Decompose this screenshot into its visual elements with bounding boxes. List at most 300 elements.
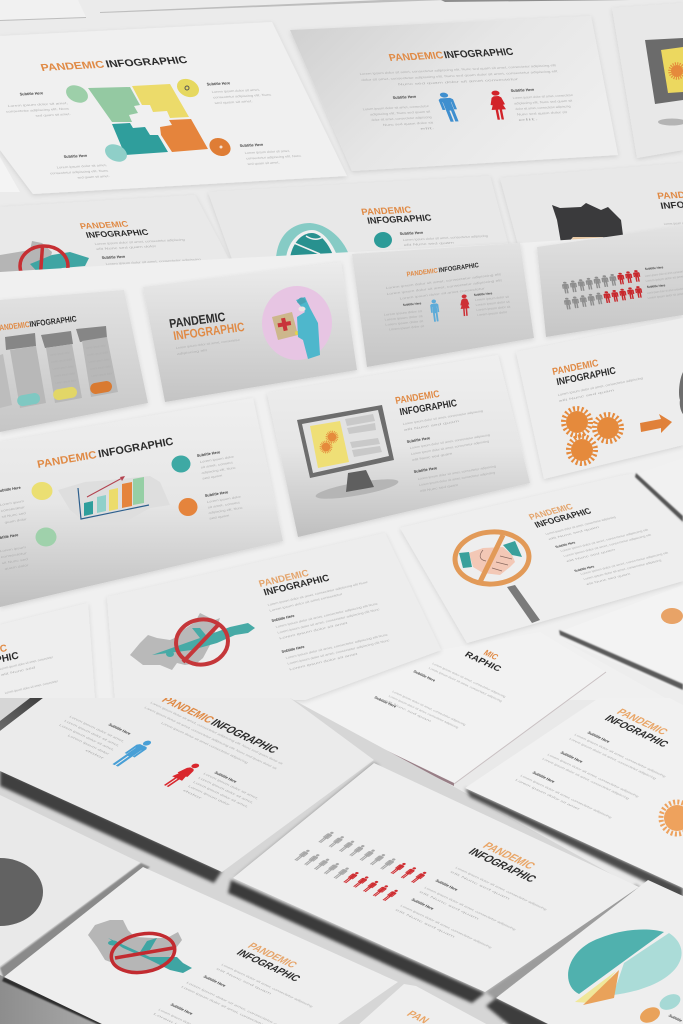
title	[394, 387, 458, 419]
subtitle right: Subtitle Here	[510, 88, 535, 93]
lower left background	[0, 698, 640, 1024]
text block: Lorem ipsum dolor sit amet, consectetur	[4, 679, 59, 695]
subtitle: Subtitle Here	[554, 541, 576, 549]
text block left: dolor	[84, 749, 105, 760]
title	[387, 46, 515, 64]
title: INFOGRAPHIC	[399, 398, 458, 418]
table text: Lorem ipsum dolor	[55, 378, 77, 385]
slide: people perspective	[233, 763, 639, 992]
pill: yellow	[52, 386, 78, 401]
text block top right	[200, 454, 237, 480]
text block	[0, 655, 55, 677]
title	[39, 55, 189, 74]
text block	[418, 886, 517, 935]
text block: Lorem ipsum dolor sit amet, consectetur adipiscing	[399, 904, 493, 949]
title	[36, 436, 175, 471]
text block: Lorem ipsum dolor sit amet, consectetur adipiscing	[519, 774, 613, 819]
text block lower left	[0, 545, 30, 571]
text block: Lorem ipsum dolor sit amet, consectetur adipiscing	[557, 376, 644, 397]
title: PANDEMIC	[406, 268, 438, 278]
slide: map perspective	[4, 867, 398, 1024]
subtitle: Subtitle Here	[271, 614, 295, 623]
text block	[275, 601, 382, 640]
text block: Lorem ipsum dolor sit amet	[514, 778, 581, 811]
text block lower left: Lorem ipsum	[0, 545, 27, 553]
text block: Lorem ipsum dolor sit amet, consectetur adipiscing elit	[562, 533, 652, 558]
intro text	[267, 580, 371, 613]
text block right: Nunc sed quam dolor sit	[516, 110, 568, 116]
table text: Lorem ipsum dolor	[90, 364, 111, 371]
subtitle: Subtitle Here	[573, 565, 595, 573]
title fragment	[463, 642, 510, 674]
title: PANDEMIC	[614, 707, 671, 737]
subtitle left: Subtitle Here	[403, 301, 422, 307]
text block right: sit amet, consect	[207, 500, 240, 509]
text block left: dolor sit amet, consectetur adipiscing	[371, 115, 432, 122]
table text: Lorem ipsum dolor	[54, 371, 75, 378]
text block: elit Nunc sed quam	[559, 388, 615, 403]
text block: Lorem ipsum dolor sit amet, consectetur adipiscing	[568, 737, 658, 780]
icon: orange circle	[178, 498, 198, 516]
slide: puzzle pieces	[0, 22, 347, 194]
table text: Lorem ipsum dolor	[85, 343, 106, 350]
text block: Lorem ipsum dolor sit amet, consectetur adipiscing	[402, 234, 489, 242]
slide: man and woman small	[352, 243, 534, 367]
table text: Lorem ipsum dolor	[88, 357, 110, 364]
text block	[428, 662, 507, 703]
text block: Lorem ipsum dolor sit amet, consectetur adipiscing elit Nunc	[275, 601, 379, 629]
title	[656, 188, 683, 212]
text block	[181, 982, 276, 1024]
icon: map with plane and prohibited sign	[130, 613, 255, 670]
title: INFOGRAPHIC	[29, 314, 77, 329]
text block lower left: quam dolor	[4, 563, 29, 571]
icon: orange circle	[638, 1004, 662, 1024]
slide: doctor cover	[143, 262, 357, 402]
intro text: Lorem ipsum dolor sit amet consectetur	[269, 592, 343, 613]
title: PANDEMIC	[79, 219, 130, 231]
intro text: Lorem ipsum dolor sit amet, consectetur adipiscing	[544, 515, 617, 536]
text block	[384, 690, 467, 736]
slide: monitor partial	[612, 3, 683, 158]
text block: Lorem ipsum dolor sit amet, consectetur adipiscing	[431, 662, 507, 699]
slide: viruses	[516, 318, 683, 479]
text block	[647, 286, 683, 300]
intro text	[449, 866, 548, 915]
title: INFOGRAPHIC	[533, 506, 593, 530]
text block: Lorem ipsum dolor sit amet, consectetur adipiscing elit Nunc	[287, 638, 391, 666]
text block bottom left: sed quam sit amet.	[77, 174, 110, 180]
text block	[663, 220, 683, 232]
chart: pie	[568, 930, 682, 1005]
subtitle: Subtitle Here	[434, 878, 460, 892]
text block bottom right: sed quam sit amet.	[247, 160, 280, 166]
icon: head	[552, 203, 624, 245]
text block	[394, 904, 493, 953]
slide: people dark shadow	[0, 769, 222, 883]
subtitle left: ubtitle Here	[0, 486, 21, 493]
text block: Lorem ipsum dolor sit amet, consectetur adipiscing	[411, 439, 490, 456]
title	[168, 307, 246, 343]
slide: map perspective shadow	[2, 977, 110, 1024]
text block bottom left: consectetur adipiscing elit. Nunc	[50, 169, 109, 175]
text block right: Lorem ipsum dolor sit	[475, 295, 509, 302]
title: INFOGRAPHIC	[97, 436, 175, 460]
icon: computer monitor	[297, 405, 399, 503]
text block bottom right: Lorem ipsum dolor sit amet,	[244, 149, 290, 155]
text block	[516, 774, 612, 818]
table column two	[5, 333, 46, 408]
text block: elit Nunc sed quam	[384, 699, 433, 723]
icon: green circle	[36, 528, 56, 546]
text block left: elit.	[420, 126, 435, 131]
icon: no handshake	[453, 529, 540, 623]
text block: elit Nunc sed	[1, 665, 36, 677]
text block: Lorem ipsum dolor sit amet, consectetur adipiscing	[180, 985, 288, 1024]
lower section	[0, 677, 683, 1024]
arrow	[640, 414, 672, 433]
table column one	[0, 354, 12, 408]
title: PANDEMIC	[159, 695, 217, 726]
intro text: Lorem ipsum dolor sit amet, consectetur adipiscing elit	[386, 278, 502, 296]
text block left: consectetur adipiscing elit. Nunc	[6, 107, 70, 114]
text block: Lorem ipsum dolor sit amet	[289, 652, 358, 671]
text block left: Lorem ipsum dolor sit	[389, 324, 425, 331]
figure partial	[679, 372, 683, 414]
text block right: adipiscing elit. Nunc	[208, 505, 243, 515]
text block right	[475, 295, 512, 317]
text block bottom right	[244, 148, 304, 166]
text block: Lorem ipsum dolor sit amet, consectetur adipiscing	[541, 757, 631, 800]
text block: Lorem ipsum dolor sit amet, consectetur adipiscing elit	[559, 528, 649, 553]
text block lower left: sit Nunc sed	[1, 557, 28, 565]
text block right	[184, 772, 258, 808]
text block	[409, 433, 493, 462]
text block: Lorem ipsum dolor sit amet, consectetur adipiscing elit	[579, 551, 669, 576]
text block bottom left: Lorem ipsum dolor sit amet,	[56, 163, 107, 169]
title: PANDEMIC	[258, 568, 310, 590]
title: INFOGRAPHIC	[556, 366, 617, 388]
subtitle: Subtitle Here	[169, 1002, 195, 1016]
text block	[402, 234, 490, 247]
subtitle top right: Subtitle Here	[197, 450, 220, 458]
slide fragments: top edge	[0, 0, 630, 192]
icon: red woman	[164, 764, 200, 787]
text block right: Lorem ipsum dolor sit amet,	[202, 772, 260, 800]
icon: monitor	[645, 38, 683, 126]
title	[258, 564, 331, 599]
title fragment: MIC	[482, 648, 501, 662]
text block left: Nunc sed quam dolor sit	[382, 121, 434, 127]
title: PANDEMIC	[36, 449, 98, 471]
intro text: Lorem ipsum dolor sit amet consectetur adipiscing	[160, 721, 250, 764]
subtitle: Subtitle Here	[410, 897, 436, 911]
title: PANDEMIC	[387, 50, 445, 64]
text block right: Lorem ipsum dolor sit amet,	[192, 780, 250, 809]
text block: elit Nunc sed quam	[420, 483, 459, 493]
title: PANDEMIC	[551, 358, 600, 378]
text block left: Lorem ipsum dolor sit amet,	[58, 723, 116, 752]
text block: elit Nunc sed quam	[418, 890, 481, 921]
text block	[557, 376, 645, 403]
text block left: Lorem ipsum dolor sit amet,	[68, 715, 126, 743]
title	[162, 698, 278, 753]
slide: handshake	[400, 474, 683, 643]
title	[604, 708, 668, 746]
icon: blue man	[436, 92, 462, 122]
table column four	[76, 326, 118, 397]
subtitle: Subtitle Here	[406, 436, 431, 444]
text block	[579, 551, 675, 586]
text block left: Lorem ipsum dolor sit	[384, 314, 423, 322]
title: INFOGRAPHIC	[262, 573, 331, 598]
intro text: Lorem ipsum dolor sit amet, consectetur adipiscing elit	[386, 272, 501, 290]
text block: elit Nunc sed quam dolor	[96, 244, 157, 251]
text block left: Lorem ipsum dolor sit	[384, 309, 422, 317]
slide gap: right streak	[485, 884, 645, 1000]
title: INFOGRAPHIC	[104, 55, 189, 70]
icon: virus two	[594, 414, 622, 442]
title: INFOGRAPHIC	[442, 46, 515, 61]
text block	[417, 464, 499, 493]
table text: Lorem ipsum dolor	[87, 350, 109, 357]
slide: partial left	[0, 603, 95, 700]
table column three	[41, 331, 82, 403]
text block: Lorem ipsum dolor sit amet, consectetur adipiscing elit Nunc	[285, 632, 389, 660]
text block	[176, 338, 241, 356]
title: PANDEMIC	[394, 389, 441, 407]
intro text	[544, 515, 620, 541]
text block	[541, 753, 640, 802]
intro text	[144, 702, 282, 770]
text block right: sed quam sit amet.	[214, 99, 253, 105]
text block	[154, 1008, 191, 1024]
background: upper desk	[0, 0, 683, 300]
text block: elit Nunc sed quam	[585, 572, 632, 586]
text block right: sed quam	[209, 513, 230, 520]
table text: Lorem ipsum dolor	[91, 371, 113, 378]
background: bottom corner	[0, 975, 98, 1024]
subtitle right: Subtitle Here	[213, 770, 239, 784]
icon: virus one	[564, 408, 590, 436]
intro text: elit Nunc sed quam	[404, 419, 460, 432]
icon: virus three	[568, 436, 596, 464]
intro text: Lorem ipsum dolor sit amet, consectetur adipiscing	[220, 963, 314, 1008]
subtitle right: Subtitle Here	[474, 291, 493, 297]
text block right: Lorem ipsum dolor sit amet, consectetur	[512, 93, 573, 100]
text block: elit Nunc sed quam	[394, 908, 457, 939]
text block right: Lorem ipsum dolor sit	[476, 305, 511, 312]
slide: grey circle	[0, 795, 141, 966]
text block: Lorem ipsum dolor sit amet, consectetur adipiscing elit Nunc	[277, 607, 381, 635]
intro text: Lorem ipsum dolor sit amet, consectetur adipiscing	[454, 866, 548, 911]
text block: Lorem ipsum dolor sit amet, consectetur adipiscing	[423, 886, 517, 931]
text block: Lorem ipsum dolor sit amet	[279, 621, 348, 640]
text block: Lorem ipsum dolor sit amet, consectetur adipiscing	[546, 753, 640, 798]
slide: man and woman	[290, 16, 618, 171]
title fragment: RAPHIC	[463, 650, 504, 674]
subtitle left: Subtitle Here	[392, 95, 417, 100]
icon: masked head	[276, 223, 350, 258]
title: INFOGRAPHIC	[233, 948, 303, 984]
text block	[94, 238, 187, 251]
gap: blurred edge above map slide	[0, 863, 150, 982]
subtitle: Subtitle Here	[586, 730, 612, 744]
title: PANDEMIC	[480, 841, 538, 872]
subtitle: Subtitle Here	[531, 770, 557, 784]
text block top right: adipiscing elit. Nunc	[201, 465, 236, 475]
text block right: Lorem ipsum dolor	[207, 495, 241, 504]
text block: Lorem ipsum dolor sit amet, consectetur adipiscing	[417, 464, 497, 481]
subtitle bottom left: Subtitle Here	[63, 154, 88, 159]
subtitle: Subtitle Here	[412, 670, 436, 683]
text block: elit Nunc sed	[665, 227, 683, 232]
text block: Lorem ipsum dolor sit amet, consectetur adipiscing	[388, 694, 460, 729]
subtitle: Subtitle Here	[202, 974, 228, 988]
intro text: elit Nunc sed quam	[215, 967, 273, 996]
title: INFOGRAPHIC	[172, 319, 246, 343]
slide: handshake partial title	[278, 632, 606, 786]
text block: Lorem ipsum dolor sit amet, consectetur adipiscing	[428, 666, 503, 703]
slide: pricing table	[0, 290, 148, 432]
slide: bar chart on world map	[0, 398, 283, 607]
text block: Lorem ipsum dolor sit amet	[647, 292, 683, 300]
pill: teal	[16, 392, 41, 407]
intro text: elit Nunc sed quam	[547, 525, 601, 541]
title fragment	[0, 641, 20, 670]
text block: Lorem ipsum dolor sit amet, consectetur adipiscing	[94, 238, 186, 246]
intro text: Lorem ipsum dolor sit amet consectetur	[399, 286, 485, 301]
title: INFOGRAPHIC	[85, 227, 150, 240]
intro text: Lorem ipsum dolor sit amet, consectetur adipiscing elit. Nunc sed quam dolor sit	[149, 701, 284, 765]
intro text	[386, 272, 503, 302]
text block bottom right: consectetur adipiscing elit. Nunc	[246, 154, 302, 160]
text block: Lorem ipsum dolor sit amet, consectetur	[176, 338, 240, 350]
title: INFOGRAPHIC	[207, 718, 281, 756]
subtitle: Subtitle Here	[645, 265, 664, 271]
title: PANDEMIC	[360, 205, 413, 218]
text block left: Lorem ipsum dolor sit amet,	[63, 719, 121, 747]
subtitle lower left: btitle Here	[0, 533, 19, 540]
text block right: Lorem ipsum dolor	[187, 785, 231, 806]
text block left: sit Nunc sed	[1, 511, 26, 519]
lower slide gap	[562, 640, 683, 708]
text block left	[0, 499, 28, 525]
text block right: Lorem ipsum dolor sit amet,	[197, 776, 255, 804]
icon: yellow circle	[174, 75, 202, 101]
icon: red woman	[460, 294, 470, 316]
subtitle: Subtitle Here	[281, 645, 305, 654]
text block: Lorem ipsum dolor sit amet	[645, 274, 683, 283]
text block: Lorem ipsum dolor sit amet, consectetur adipiscing	[185, 981, 298, 1024]
icon: red woman	[488, 90, 508, 120]
text block left: Lorem ipsum dolor	[66, 734, 110, 756]
text block right	[512, 93, 579, 122]
bar chart	[78, 476, 149, 519]
subtitle left: Subtitle Here	[107, 722, 133, 736]
intro text	[402, 409, 485, 432]
text block right: Lorem ipsum dolor sit	[475, 300, 510, 307]
text block	[559, 528, 655, 563]
text block right: dolor	[182, 789, 203, 800]
table text: Lorem ipsum dolor	[52, 364, 74, 371]
title: INFOGRAPHIC	[465, 847, 539, 885]
intro text	[216, 964, 313, 1008]
text block left	[4, 101, 72, 119]
text block: elit Nunc sed quam	[565, 547, 617, 563]
text block	[285, 632, 392, 671]
slide: partial with orange icon	[559, 585, 683, 708]
subtitle: Subtitle Here	[647, 283, 666, 289]
slide: monitor	[267, 355, 530, 537]
text block left	[362, 104, 435, 133]
text block left: Lorem ipsum dolor sit	[385, 319, 424, 327]
title: INFOGRAPHIC	[438, 262, 479, 274]
intro text: dolor sit amet, consectetur adipiscing elit. Nunc sed quam dolor sit amet, consectetur adipiscing elit	[361, 69, 558, 82]
title: INFOGRAPHIC	[602, 713, 671, 750]
text block: elit Nunc sed quam	[412, 451, 453, 462]
puzzle chart	[88, 84, 208, 155]
icon: yellow circle	[32, 482, 52, 500]
slide: upper right perspective	[466, 708, 683, 888]
text block top right: sit amet, consect	[200, 460, 233, 469]
intro text: Lorem ipsum dolor sit amet, consectetur adipiscing elit. Nunc sed quam dolor sit	[143, 706, 278, 770]
intro text: elit Nunc sed quam	[449, 870, 512, 901]
slide: pie shadow	[486, 998, 560, 1024]
slide: upper right perspective shadow	[465, 788, 683, 900]
pictogram rows	[561, 270, 643, 310]
background: middle section	[0, 232, 683, 700]
subtitle right: Subtitle Here	[205, 490, 228, 498]
text block: adipiscing elit	[176, 348, 207, 356]
icon: blue man	[112, 740, 151, 767]
intro text: Nunc sed quam dolor sit amet consectetur	[397, 77, 519, 86]
icon: orange circle	[206, 135, 234, 159]
slide: corner upper right	[635, 458, 683, 522]
text block left: adipiscing elit. Nunc sed quam sit	[370, 110, 431, 116]
title: INFOGRAPHIC	[366, 213, 433, 227]
subtitle bottom right: Subtitle Here	[239, 143, 264, 148]
slide: hair figure	[500, 163, 683, 270]
icon: doctor	[262, 286, 332, 360]
chart: dark circle	[0, 858, 43, 926]
text block: Lorem ipsum dolor sit amet, consectetur adipiscing	[105, 257, 202, 266]
pill: orange	[89, 380, 113, 395]
slide: map row two left	[0, 195, 240, 290]
text block top right: sed quam	[202, 473, 223, 480]
subtitle: Subtitle Here	[373, 696, 397, 709]
text block	[645, 269, 683, 283]
slide: map prohibited	[107, 533, 441, 700]
text block left: quam dolor	[4, 517, 27, 525]
table text	[85, 343, 113, 378]
intro text: Lorem ipsum dolor sit amet, consectetur adipiscing	[402, 409, 484, 426]
text block: elit Nunc sed quam	[403, 240, 455, 247]
title	[406, 262, 479, 278]
icon: orange circle	[661, 608, 683, 624]
slide: mask	[208, 176, 515, 270]
icon: teal circle	[102, 141, 130, 165]
title: PANDEMIC	[39, 59, 106, 74]
subtitle: Subtitle Here	[559, 750, 585, 764]
text block right: adipiscing elit. Nunc sed quam sit	[514, 99, 573, 105]
text block right	[207, 494, 244, 520]
map with prohibited sign	[0, 241, 89, 287]
slide: people perspective shadow	[228, 880, 485, 1003]
text block left: sed quam sit amet.	[35, 112, 71, 118]
table text	[49, 350, 77, 385]
subtitle right: Subtitle Here	[206, 81, 231, 86]
